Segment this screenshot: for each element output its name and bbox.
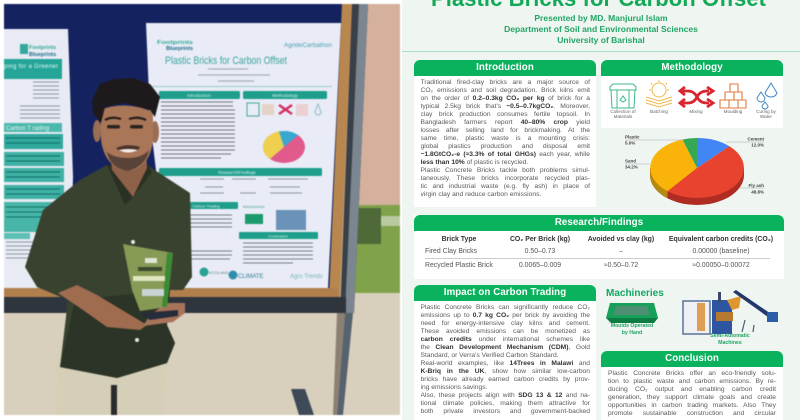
brick wall and garden [350,4,400,293]
text: introduction: on the order of 0.2–0.3kg CO₂ per kg of brick for a [420,95,590,102]
chart: material composition pie: 12.0% [751,142,764,148]
chart: material composition pie: Sand [625,158,636,164]
text: introduction: Traditional fired-clay bricks are a major source of [420,79,590,86]
heading: methodology: Methodology [661,62,723,73]
drawing: hand mould and semi-automatic machine [606,290,778,335]
left poster: Footprints [29,45,56,51]
text: introduction: global plastics production and disposal emit [420,143,590,150]
main poster: Blueprints [166,46,193,52]
label: curing by water: Water [760,114,772,119]
panel: introduction [414,60,596,207]
table header: Equivalent carbon credits (CO₂) [669,236,773,243]
left poster [4,29,73,288]
presenter credits [504,13,698,45]
chart: material composition pie: 34.2% [625,164,638,170]
main poster: Plastic Bricks for Carbon Offset [165,55,287,67]
icon: mixing arrows [680,87,713,107]
heading: impact on carbon trading [414,285,596,301]
bench [291,389,314,415]
text: introduction: same time, plastic waste is a mounting crisis: [420,135,590,142]
presenter credits: University of Barishal [557,35,645,45]
text: conclusion: ducing CO₂ output and enabling carbon credit [608,386,776,393]
text: conclusion: tion to plastic waste and carbon emissions. By re- [608,378,776,385]
text: impact: both private investors and government-backed [420,408,590,415]
panel: methodology [601,60,783,128]
heading: machineries: Machineries [606,288,664,299]
text: conclusion [608,370,776,417]
label: collection of materials: Materials [614,114,632,119]
text: introduction: less than 10% of plastic is recycled. [420,159,528,166]
row: recycled plastic brick: ≈0.00050–0.00072 [692,262,750,269]
trophy [123,244,178,320]
caption: machine: Semi-Automatic [710,333,750,339]
text: introduction: tic and industrial waste (e.g. fly ash) in place of [420,183,590,190]
label: moulding: Moulding [724,109,742,114]
chart: material composition pie: Cement [747,136,764,142]
table: brick comparison [425,236,773,269]
text: impact: Standard, or Verra's Verified Carbon Standard. [420,352,559,359]
row: fired clay bricks: 0.00000 (baseline) [692,248,750,255]
main poster [146,23,341,288]
text: impact: the Clean Development Mechanism (CDM), Gold [420,344,590,351]
table header [442,236,773,243]
main poster: Carbon Trading [192,204,220,208]
icon: brick machine [683,290,778,334]
impact body background [414,301,596,420]
label: collection of materials: Collection of [610,109,636,114]
main poster: AgrideCarbathon [284,43,332,49]
table header: CO₂ Per Brick (kg) [510,236,570,243]
text: introduction: taneously. These bricks incorporate recycled plas- [420,175,590,182]
panel: machineries [606,288,778,346]
heading: research findings: Research/Findings [555,217,643,228]
left poster: Blueprints [29,52,56,58]
heading: research findings [414,215,784,231]
caption: mould: by Hand [622,330,642,336]
text: introduction: Plastic Concrete Bricks tackle both problems simul- [420,167,590,174]
row: fired clay bricks: Fired Clay Bricks [425,248,477,255]
icons: methodology steps [610,80,778,110]
label: mixing: Mixing [689,109,703,114]
introduction body background [414,76,596,207]
text: conclusion: opportunities in carbon trading markets. Also They [608,402,776,409]
text: conclusion: generation, they support climate goals and create [608,394,776,401]
text: impact: ing emissions savings. [420,384,487,391]
text: impact: carbon credits under international schemes like [420,336,590,343]
row: recycled plastic brick: ≈0.50–0.72 [604,262,638,269]
text: introduction: Bangladesh farmers report 40–80% crop yield [420,119,590,126]
panel: impact on carbon trading [414,285,596,420]
row divider [425,257,770,260]
text: introduction: virgin clay and reduce carbon emissions. [420,191,541,198]
icon: batching [646,80,672,107]
chart: material composition pie [625,134,764,205]
presenter credits: Department of Soil and Environmental Sciences [504,24,698,34]
row: fired clay bricks: 0.50–0.73 [525,248,555,255]
label: curing by water: Curing by [756,109,776,114]
table header: Brick Type [442,236,476,243]
label: collection of materials [610,109,636,119]
heading: conclusion [601,351,783,367]
heading: introduction: Introduction [476,62,534,73]
label: curing by water [756,109,776,119]
text: introduction: CO₂ emissions and soil degradation. Brick kilns emit [420,87,590,94]
text: introduction: ~1.8GtCO₂-e (≈3.3% of total GHGs) each year, while [420,151,590,158]
presenter pants [56,358,168,415]
text: introduction: typical 2.5kg brick that's ~0.5–0.7kgCO₂. Moreover, [420,103,590,110]
caption: machine: Machines [718,340,742,346]
chart: material composition pie: 5.0% [625,140,635,146]
row: recycled plastic brick: Recycled Plastic Brick [425,262,493,269]
text: conclusion: promote sustainable construction and circular [608,410,776,417]
text: introduction: clay brick production consumes fertile topsoil. In [420,111,590,118]
photo: presenter with trophy at poster board [3,3,401,416]
left poster: ping for a Greener [4,64,58,70]
panel: conclusion [601,351,783,420]
row: fired clay bricks [425,248,750,255]
conclusion body background [601,367,783,420]
panel: poster background [402,0,800,420]
icon: green mould [606,303,658,323]
left poster: Carbon T rading [6,126,49,132]
heading: introduction [414,60,596,76]
main poster: ECOLAND [209,270,228,275]
text: introduction [420,79,590,198]
text: impact: K-Briq in the UK, show how similar low-carbon [420,368,590,375]
caption: machine [710,333,750,346]
main poster: Research/Findings [218,170,257,175]
divider [402,50,800,52]
poster board [4,4,368,415]
caption: mould [611,323,653,336]
panel: research findings [414,215,784,279]
presenter neck and face [93,105,159,197]
presenter hair [92,78,160,123]
text: impact: bricks have already earned carbon credits by prov- [420,376,590,383]
icon: collection bin [610,84,636,108]
text: conclusion: Plastic Concrete Bricks offer an eco-friendly solu- [608,370,776,376]
chart: material composition pie: Plastic [625,134,640,140]
table header: Avoided vs clay (kg) [588,236,654,243]
chart: material composition pie: Fly ash [748,183,764,188]
presenter forearms and hands [58,285,185,330]
row: recycled plastic brick [425,262,750,269]
presenter shirt [25,163,192,378]
text: impact [420,304,590,415]
heading: conclusion: Conclusion [665,353,719,364]
chart: material composition pie: 48.8% [751,190,764,194]
text: impact: Also, these projects align with SDG 13 & 12 and na- [420,392,590,399]
heading: methodology [601,60,783,76]
text: impact: tional climate policies, making them attractive for [420,400,590,407]
row: recycled plastic brick: 0.0065–0.009 [519,262,561,269]
icon: moulding bricks [720,84,746,108]
row: fired clay bricks: – [619,248,623,255]
main poster: Methodology [272,93,299,98]
text: impact: emissions up to 0.7 kg CO₂ per brick by avoiding the [420,312,590,319]
text: impact: Real-world examples, like 14Trees in Malawi and [420,360,590,367]
heading: impact on carbon trading: Impact on Carbon Trading [444,287,566,298]
leg gap [111,385,117,415]
text: impact: These avoided emissions can be monetized as [420,328,590,335]
main poster: CLIMATE [238,274,264,280]
label: batching: Batching [650,109,668,114]
icon: water drops [757,83,777,109]
presenter credits: Presented by MD. Manjurul Islam [534,13,668,23]
main poster: Agro Trends [290,274,323,280]
text: impact: need for energy-intensive clay kilns and cement. [420,320,590,327]
main poster: Machineries [243,204,265,209]
text: introduction: losses after selling land for brickmaking. At the [420,127,590,134]
main poster: Conclusion [268,234,288,238]
caption: mould: Mouids Operated [611,323,653,329]
main poster: Introduction [187,93,211,98]
text: impact: Plastic Concrete Bricks can significantly reduce CO₂ [420,304,590,310]
main poster: Footprints [157,40,193,46]
